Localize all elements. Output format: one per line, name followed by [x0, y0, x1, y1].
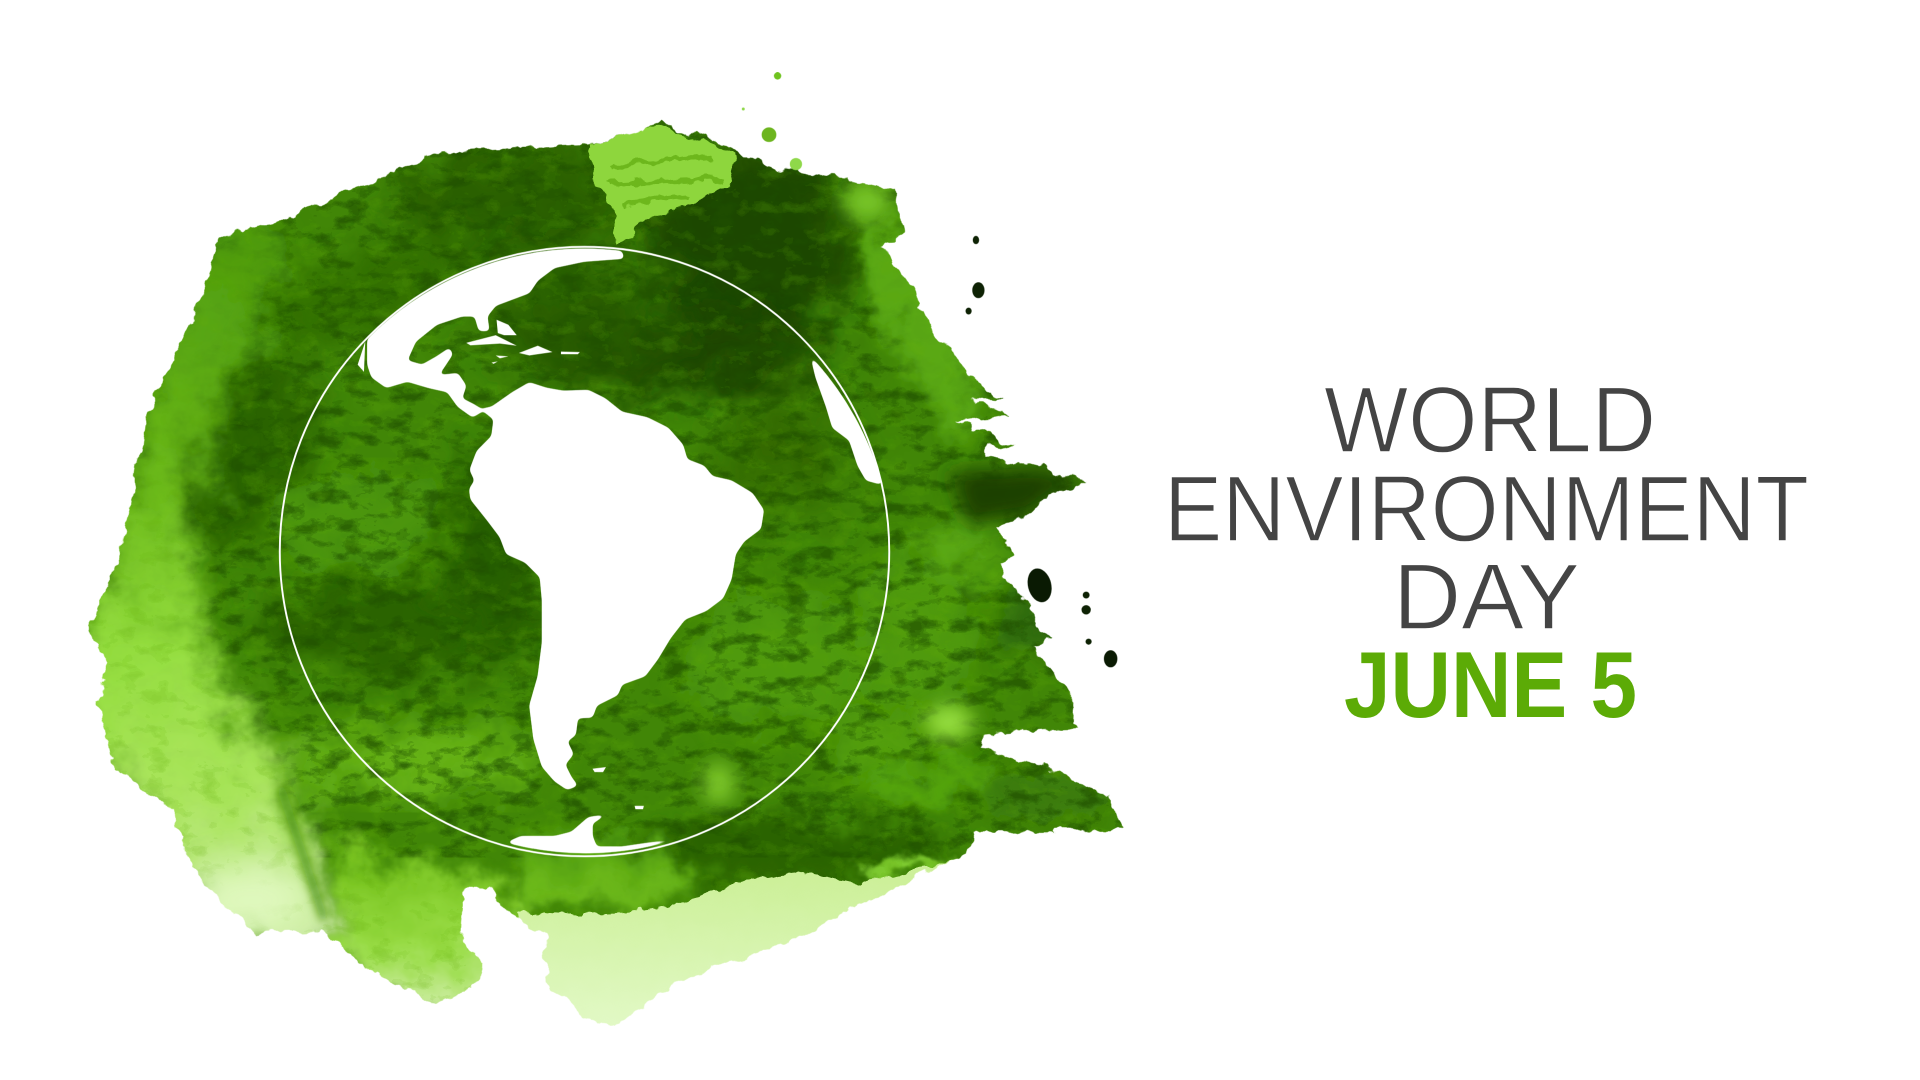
base wash: [88, 120, 1124, 1004]
land masses: [367, 249, 882, 853]
light regions: [61, 206, 1004, 1029]
mottled dark texture: [97, 120, 1122, 858]
pale lower wash: [516, 860, 954, 1026]
mottled light texture: [95, 135, 1106, 1000]
top light patch: [588, 126, 737, 245]
top right patch: [842, 181, 891, 223]
ink splatters: [742, 72, 1117, 667]
alaska sliver: [358, 342, 365, 372]
title: world environment day: DAY: [1393, 544, 1580, 649]
date: june 5: JUNE 5: [1344, 632, 1637, 737]
southern islands: [593, 767, 644, 809]
dark tail: [949, 468, 1090, 524]
watercolor blob: [88, 120, 1124, 1026]
pale left lower wash: [190, 866, 312, 934]
bright spot right: [924, 705, 973, 740]
globe: [280, 247, 889, 856]
africa: [811, 356, 882, 485]
title: world environment day: WORLD: [1324, 367, 1656, 472]
title: world environment day: ENVIRONMENT: [1164, 456, 1809, 561]
dark regions: [145, 141, 1114, 885]
caribbean islands: [466, 320, 580, 364]
interior mid-light washes: [263, 474, 973, 796]
globe outline: [280, 247, 889, 856]
dark seam: [277, 784, 328, 921]
antarctica: [506, 814, 688, 853]
bright spot bottom: [703, 762, 735, 806]
americas: [367, 249, 764, 790]
title: world environment day: [1164, 367, 1809, 649]
